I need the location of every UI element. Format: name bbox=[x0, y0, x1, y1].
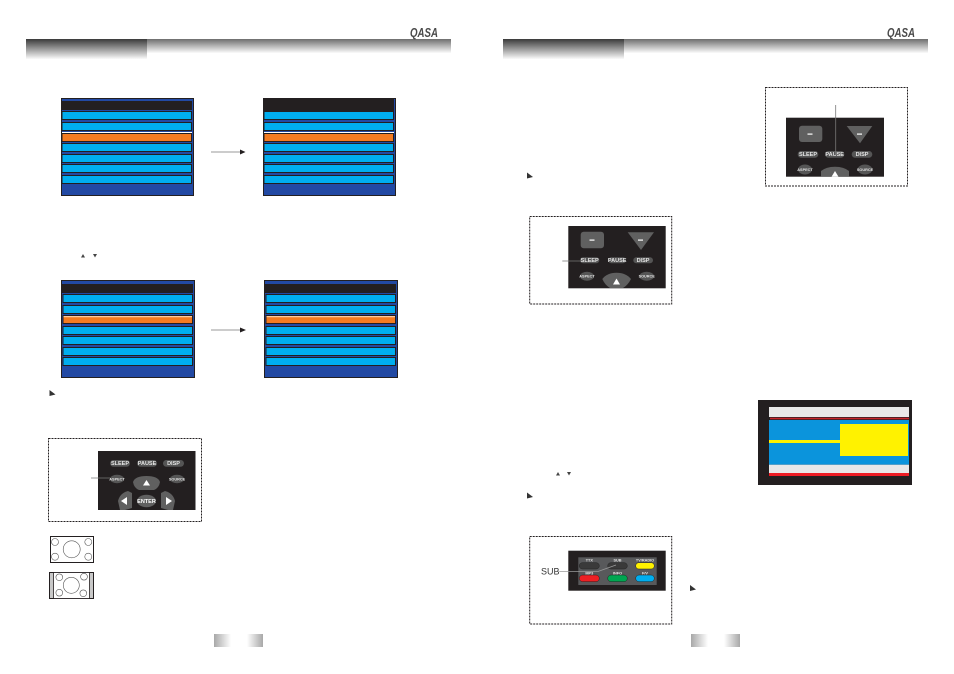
panel: remote with aspect button: ENTER bbox=[137, 499, 156, 505]
panel: remote with SUB button: INFO bbox=[613, 571, 622, 575]
left page number tab bbox=[214, 634, 263, 647]
panel: remote with pause button: SLEEP bbox=[799, 152, 817, 158]
on-screen display with subtitle menu bbox=[758, 400, 912, 485]
icon: note marker, right page bottom bbox=[690, 585, 696, 591]
panel: remote with SUB button bbox=[530, 536, 672, 624]
panel: remote with aspect button: DISP bbox=[167, 461, 180, 467]
left page logo: QASA bbox=[410, 25, 438, 40]
panel: remote with pause button: SOURCE bbox=[857, 168, 874, 172]
right page number tab bbox=[691, 634, 740, 647]
panel: remote with SUB button: SUB bbox=[541, 566, 560, 576]
right page logo: QASA bbox=[887, 25, 915, 40]
menu screen 2 bbox=[264, 98, 396, 196]
icon: pillarbox picture format bbox=[50, 572, 94, 598]
panel: remote with SUB button: TV/RADIO bbox=[636, 559, 654, 563]
panel: remote with sleep button: SLEEP bbox=[581, 258, 599, 264]
panel: remote with sleep button: DISP bbox=[637, 258, 650, 264]
panel: remote with SUB button: SUB bbox=[613, 559, 622, 563]
panel: remote with pause button: DISP bbox=[856, 152, 869, 158]
right page header band bbox=[503, 39, 928, 59]
panel: remote with pause button: PAUSE bbox=[825, 152, 844, 158]
panel: remote with pause button: ASPECT bbox=[797, 168, 813, 172]
icon: note marker, right page top bbox=[527, 172, 533, 178]
icon: note marker, right page middle bbox=[527, 492, 533, 498]
panel: remote with aspect button bbox=[48, 438, 202, 522]
panel: remote with aspect button: PAUSE bbox=[138, 461, 157, 467]
panel: remote with aspect button: ASPECT bbox=[109, 478, 125, 482]
panel: remote with sleep button: ASPECT bbox=[579, 274, 595, 278]
panel: remote with aspect button: SOURCE bbox=[169, 478, 186, 482]
panel: remote with sleep button bbox=[530, 216, 672, 304]
icon: note marker, left page bbox=[50, 390, 56, 396]
menu screen 3 bbox=[62, 280, 194, 378]
menu screen 4 bbox=[264, 280, 398, 378]
menu screen 1 bbox=[62, 98, 194, 196]
arrow between menu 1 and 2 bbox=[211, 150, 246, 154]
panel: remote with sleep button: SOURCE bbox=[639, 274, 655, 278]
panel: remote with pause button bbox=[766, 88, 908, 186]
panel: remote with SUB button: F/V bbox=[642, 571, 648, 575]
panel: remote with SUB button: TTX bbox=[586, 559, 593, 563]
panel: remote with aspect button: SLEEP bbox=[111, 461, 129, 467]
panel: remote with sleep button: PAUSE bbox=[608, 258, 627, 264]
icon: widescreen picture format bbox=[50, 536, 94, 562]
panel: remote with SUB button: MP3 bbox=[585, 571, 593, 575]
icon: up and down arrows, right page bbox=[556, 472, 571, 476]
arrow between menu 3 and 4 bbox=[211, 328, 246, 332]
icon: up and down arrows, left page bbox=[81, 254, 97, 258]
left page header band bbox=[26, 39, 451, 59]
